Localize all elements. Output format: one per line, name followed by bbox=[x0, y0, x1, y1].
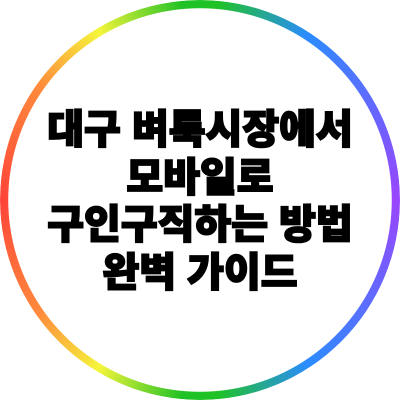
title: 완벽 가이드 bbox=[102, 250, 298, 294]
title: 구인구직하는 방법 bbox=[47, 203, 353, 247]
title bbox=[47, 108, 353, 294]
title: 대구 벼룩시장에서 bbox=[47, 108, 353, 152]
title: 모바일로 bbox=[126, 156, 274, 200]
